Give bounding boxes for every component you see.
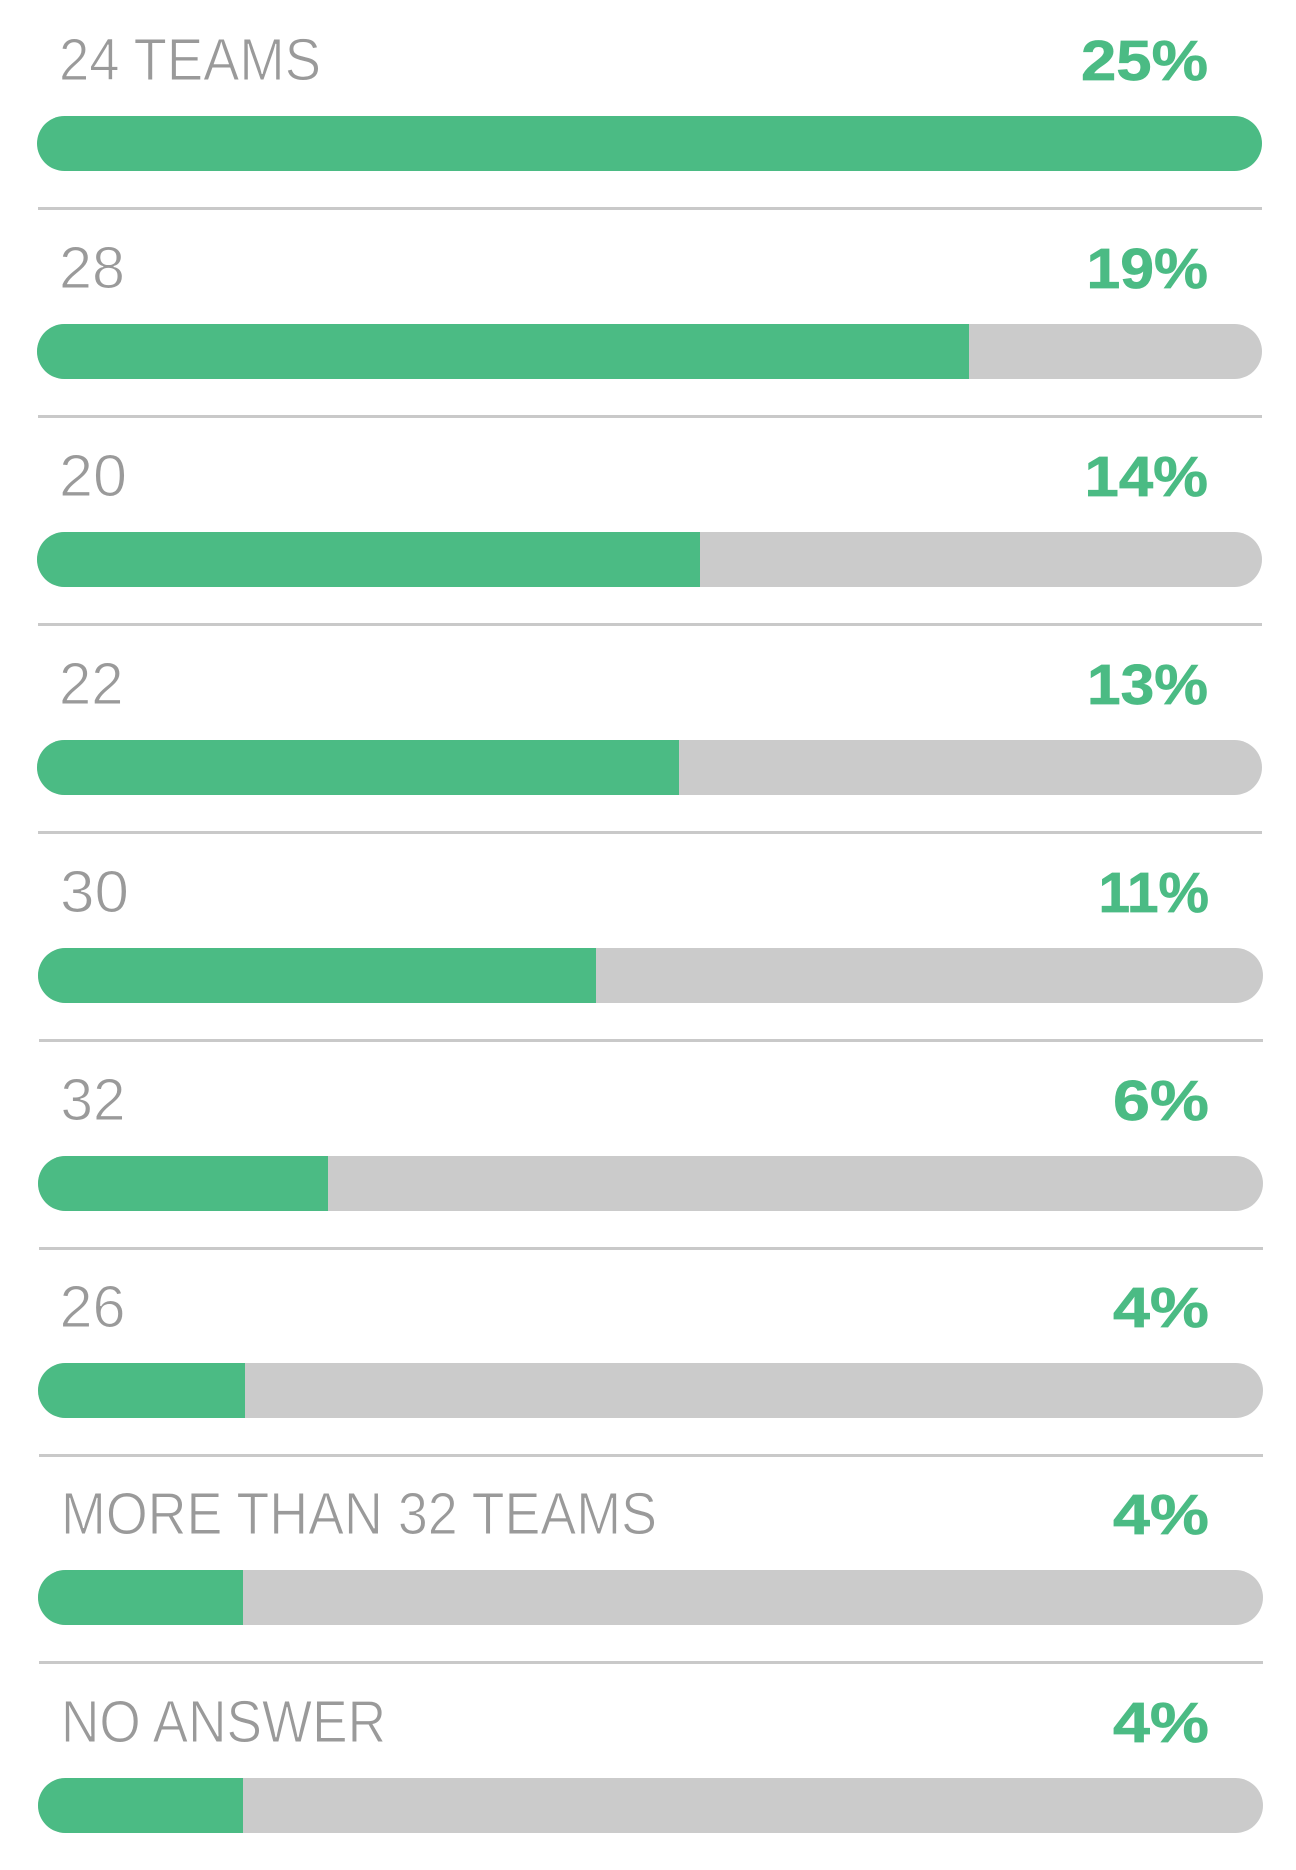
bar fill: 25%	[37, 116, 1262, 171]
row: 28	[37, 235, 1262, 379]
bar fill: 13%	[37, 740, 679, 795]
bar track	[38, 1570, 1263, 1625]
value: 6%: 6%	[1113, 1069, 1209, 1133]
row: more than 32 teams	[38, 1481, 1263, 1625]
value: 13%: 13%	[1087, 653, 1208, 717]
bar track	[37, 740, 1262, 795]
value: 4%: 4%	[1113, 1691, 1209, 1755]
row: no answer	[38, 1689, 1263, 1833]
label: 26: 26	[60, 1274, 126, 1340]
value: 25%: 25%	[1081, 29, 1208, 93]
bar track	[38, 1156, 1263, 1211]
bar fill: 4%	[38, 1570, 243, 1625]
row: 20	[37, 443, 1262, 587]
label: 28: 28	[59, 235, 125, 301]
label: no answer: NO ANSWER	[61, 1689, 386, 1755]
row: 24 teams	[37, 27, 1262, 171]
bar fill: 19%	[37, 324, 969, 379]
label: 22: 22	[59, 651, 124, 717]
bar fill: 11%	[38, 948, 596, 1003]
bar track	[37, 532, 1262, 587]
value: 4%: 4%	[1113, 1483, 1209, 1547]
bar fill: 14%	[37, 532, 700, 587]
label: more than 32 teams: MORE THAN 32 TEAMS	[61, 1481, 657, 1547]
label: 24 teams: 24 TEAMS	[59, 27, 321, 93]
bar fill: 4%	[38, 1778, 243, 1833]
label: 32: 32	[60, 1067, 126, 1133]
row: 26	[38, 1274, 1263, 1418]
value: 4%: 4%	[1113, 1276, 1209, 1340]
bar track	[37, 324, 1262, 379]
bar fill: 4%	[38, 1363, 245, 1418]
row: 30	[38, 859, 1263, 1003]
row: 22	[37, 651, 1262, 795]
bar track	[38, 1778, 1263, 1833]
label: 20: 20	[59, 443, 127, 509]
row: 32	[38, 1067, 1263, 1211]
bar track	[38, 1363, 1263, 1418]
bar track	[38, 948, 1263, 1003]
value: 11%: 11%	[1098, 861, 1209, 925]
label: 30: 30	[60, 859, 129, 925]
value: 19%: 19%	[1086, 237, 1208, 301]
bar fill: 6%	[38, 1156, 328, 1211]
value: 14%: 14%	[1084, 445, 1208, 509]
